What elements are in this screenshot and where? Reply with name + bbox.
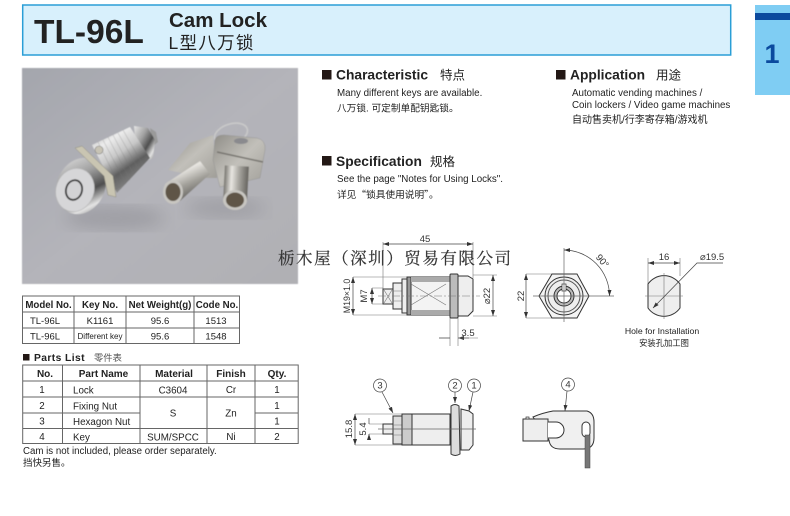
label: M7: M7	[359, 289, 370, 303]
product name Chinese: L型八万锁	[168, 33, 255, 53]
drawing: end view with dimensions	[516, 248, 614, 322]
parts table: Ni	[226, 432, 236, 443]
lock	[47, 126, 158, 222]
parts table: Finish	[216, 369, 246, 380]
label: dia 22: ⌀22	[482, 288, 493, 304]
parts table: Lock	[73, 386, 94, 396]
section: specification: See the page "Notes for Using Locks".	[337, 174, 503, 185]
drawing: front view with dimensions	[342, 234, 497, 346]
parts table: Qty.	[268, 369, 287, 380]
parts table: 1	[274, 401, 280, 412]
model number: TL-96L	[34, 14, 144, 51]
balloon 1: 1	[471, 380, 477, 392]
label: 16: 16	[659, 252, 669, 263]
model table: K1161	[87, 316, 113, 327]
parts table: C3604	[159, 386, 188, 396]
parts table: Cr	[226, 385, 237, 396]
parts table: Material	[155, 369, 193, 380]
section: specification: 规格	[430, 154, 456, 169]
model table: TL-96L	[30, 316, 60, 327]
parts table: Part Name	[79, 369, 129, 380]
drawing: installation hole: 安装孔加工图	[639, 338, 689, 348]
parts note: Cam is not included, please order separately.	[23, 446, 217, 457]
section: application: 自动售卖机/行李寄存箱/游戏机	[572, 113, 708, 126]
model table: Net Weight(g)	[129, 300, 191, 311]
label: 3.5: 3.5	[461, 328, 475, 339]
section: characteristic: Characteristic	[336, 68, 428, 82]
parts table: Fixing Nut	[73, 402, 117, 412]
section: application: Coin lockers / Video game machines	[572, 100, 730, 111]
watermark: 栃木屋（深圳）贸易有限公司	[278, 249, 511, 268]
balloon 2: 2	[452, 380, 458, 392]
parts table: No.	[37, 369, 53, 380]
hole caption: Hole for Installation	[625, 326, 699, 336]
label: M19: M19×1.0	[342, 279, 352, 313]
parts table: 1	[39, 385, 45, 396]
label: 90 degrees: 90°	[593, 252, 611, 271]
section: specification: Specification	[336, 154, 422, 169]
section: characteristic: 特点	[440, 68, 465, 82]
drawing: side view with balloons	[344, 379, 480, 456]
section: application: 用途	[656, 68, 682, 82]
product name: Cam Lock	[169, 9, 268, 32]
label: dia 19.5: ⌀19.5	[700, 252, 724, 263]
parts table: 1	[274, 385, 280, 396]
label: 45: 45	[420, 234, 430, 245]
parts table	[23, 365, 298, 444]
model table: Model No.	[25, 300, 72, 311]
model table: Key No.	[82, 300, 118, 311]
chapter tab	[755, 5, 790, 95]
model table: Code No.	[196, 300, 239, 311]
section: characteristic: 八万锁. 可定制单配钥匙锁。	[337, 102, 459, 114]
parts table: Key	[73, 432, 90, 444]
model table	[22, 296, 240, 344]
parts list heading	[23, 352, 122, 364]
parts list heading: 零件表	[94, 352, 122, 363]
model table: 1513	[205, 316, 227, 327]
parts table: SUM/SPCC	[147, 432, 199, 444]
parts table: S	[170, 408, 177, 420]
drawing: key with balloon	[523, 378, 594, 468]
model table: 95.6	[151, 332, 169, 342]
section: characteristic: Many different keys are available.	[337, 88, 482, 99]
parts table: 1	[274, 416, 280, 428]
parts list heading: Parts List	[34, 353, 85, 364]
parts table: Hexagon Nut	[73, 417, 130, 428]
section: specification: 详见“锁具使用说明”。	[337, 187, 439, 201]
label: 15.8: 15.8	[344, 420, 355, 438]
parts note	[23, 446, 217, 469]
label: 22: 22	[516, 291, 527, 301]
parts table: 2	[274, 432, 280, 443]
product photo	[22, 68, 298, 284]
parts table: 3	[39, 416, 45, 428]
parts table: Zn	[225, 408, 237, 420]
model table: 95.6	[151, 316, 169, 327]
model table: 1548	[205, 332, 227, 342]
parts note: 挡快另售。	[23, 457, 71, 469]
balloon 3: 3	[377, 380, 383, 392]
keys	[163, 119, 265, 210]
model table: Different key	[78, 331, 123, 341]
drawing: installation hole	[625, 252, 724, 348]
section: specification	[322, 154, 503, 201]
section: application: Automatic vending machines /	[572, 88, 703, 99]
parts table: 2	[39, 401, 45, 412]
title banner	[23, 5, 731, 55]
section: characteristic	[322, 68, 482, 114]
label: 5.4: 5.4	[358, 422, 369, 436]
model table: TL-96L	[30, 332, 60, 342]
balloon 4: 4	[565, 380, 571, 390]
section: application	[556, 68, 730, 126]
chapter tab: 1	[764, 39, 780, 69]
section: application: Application	[570, 68, 645, 82]
parts table: 4	[39, 432, 45, 443]
